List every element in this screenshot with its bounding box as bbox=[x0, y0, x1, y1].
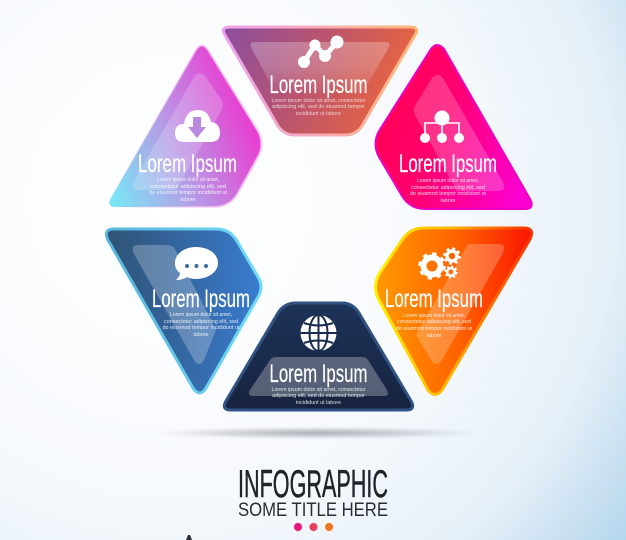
top body text: incididunt ut labore bbox=[296, 111, 341, 117]
blue body text: do eiusmod tempor incididunt ut bbox=[162, 325, 240, 331]
blue body text bbox=[162, 312, 240, 338]
top body text: Lorem ipsum dolor sit amet, consectetur bbox=[272, 98, 366, 104]
top panel glass highlight bbox=[251, 42, 389, 92]
purple body text: Lorem ipsum dolor sit amet, bbox=[157, 177, 219, 183]
pink panel shape bbox=[376, 45, 532, 209]
panel: top analytics bbox=[223, 27, 417, 135]
orange panel shape bbox=[376, 228, 532, 394]
blue heading: Lorem Ipsum bbox=[152, 285, 250, 313]
purple body text: do eiusmod tempor incididunt ut bbox=[149, 190, 228, 196]
orange panel glass highlight bbox=[416, 244, 504, 364]
dark panel glass highlight bbox=[249, 357, 388, 396]
blue panel shape bbox=[106, 229, 261, 393]
pink body text: do eiusmod tempor incididunt ut bbox=[410, 191, 487, 197]
subtitle: SOME TITLE HERE bbox=[238, 500, 388, 521]
purple panel shape bbox=[109, 46, 261, 207]
pink body text: labore bbox=[440, 198, 456, 204]
orange body text: do eiusmod tempor incididunt ut bbox=[396, 326, 473, 332]
panel: gears bbox=[376, 228, 532, 394]
purple body text: consectetur adipiscing elit, sed bbox=[150, 184, 226, 190]
icon: hierarchy bbox=[420, 110, 464, 143]
panel: cloud download bbox=[109, 46, 261, 207]
top panel shape bbox=[223, 27, 417, 135]
top body text bbox=[272, 98, 366, 117]
cropped mark at bottom edge bbox=[186, 535, 192, 540]
orange body text: consectetur adipiscing elit, sed bbox=[397, 319, 471, 325]
pink panel glass highlight bbox=[414, 75, 504, 191]
icon: gears bbox=[420, 248, 460, 278]
purple heading: Lorem Ipsum bbox=[138, 150, 237, 178]
panel: speech bubble bbox=[106, 229, 261, 393]
blue body text: consectetur adipiscing elit, sed bbox=[164, 319, 238, 325]
dark heading: Lorem Ipsum bbox=[270, 360, 368, 388]
icon: line graph bbox=[298, 36, 344, 68]
ground shadow bbox=[153, 427, 483, 439]
dark panel shape bbox=[224, 303, 413, 410]
pink body text: consectetur adipiscing elit, sed bbox=[411, 185, 485, 191]
orange body text: labore bbox=[426, 333, 442, 339]
pink body text: Lorem ipsum dolor sit amet, bbox=[417, 178, 479, 184]
orange body text: Lorem ipsum dolor sit amet, bbox=[403, 313, 465, 319]
orange body text bbox=[396, 313, 473, 339]
orange heading: Lorem Ipsum bbox=[385, 285, 483, 313]
purple panel glass highlight bbox=[133, 73, 223, 190]
panel: network hierarchy bbox=[376, 45, 532, 209]
top body text: adipiscing elit, sed do eiusmod tempor bbox=[272, 104, 365, 110]
decorative dots bbox=[293, 522, 334, 532]
pink body text bbox=[410, 178, 487, 204]
dark body text bbox=[272, 387, 366, 406]
blue panel glass highlight bbox=[133, 245, 216, 364]
dark body text: Lorem ipsum dolor sit amet, consectetur bbox=[272, 387, 366, 393]
dark body text: adipiscing elit, sed do eiusmod tempor bbox=[272, 393, 365, 399]
icon: globe bbox=[300, 315, 336, 351]
blue body text: labore bbox=[194, 332, 209, 338]
icon: speech bubble bbox=[175, 247, 218, 280]
purple body text: labore bbox=[180, 197, 196, 203]
title: INFOGRAPHIC bbox=[238, 463, 388, 506]
purple body text bbox=[149, 177, 228, 203]
blue body text: Lorem ipsum dolor sit amet, bbox=[170, 312, 232, 318]
pink heading: Lorem Ipsum bbox=[399, 150, 497, 178]
icon: cloud download bbox=[175, 110, 220, 142]
top heading: Lorem Ipsum bbox=[270, 71, 368, 99]
panel: globe bbox=[224, 303, 413, 410]
dark body text: incididunt ut labore bbox=[296, 400, 341, 406]
